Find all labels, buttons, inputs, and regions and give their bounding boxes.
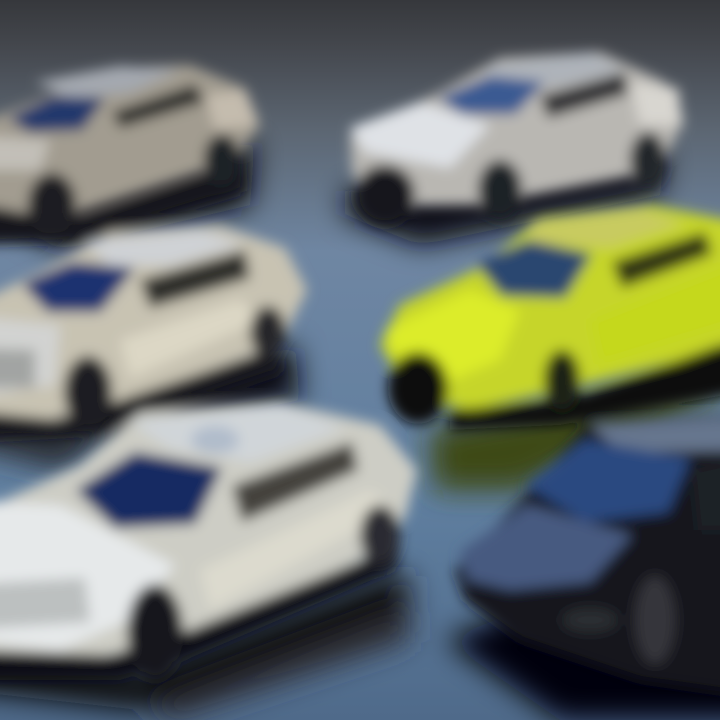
- car: bottom right dark blue: [455, 412, 720, 700]
- car: middle left cream: [0, 225, 307, 440]
- car: middle right yellow: [380, 205, 720, 430]
- car: top right white: [350, 52, 684, 225]
- car: top left beige: [0, 65, 260, 245]
- car: bottom left white: [0, 402, 417, 680]
